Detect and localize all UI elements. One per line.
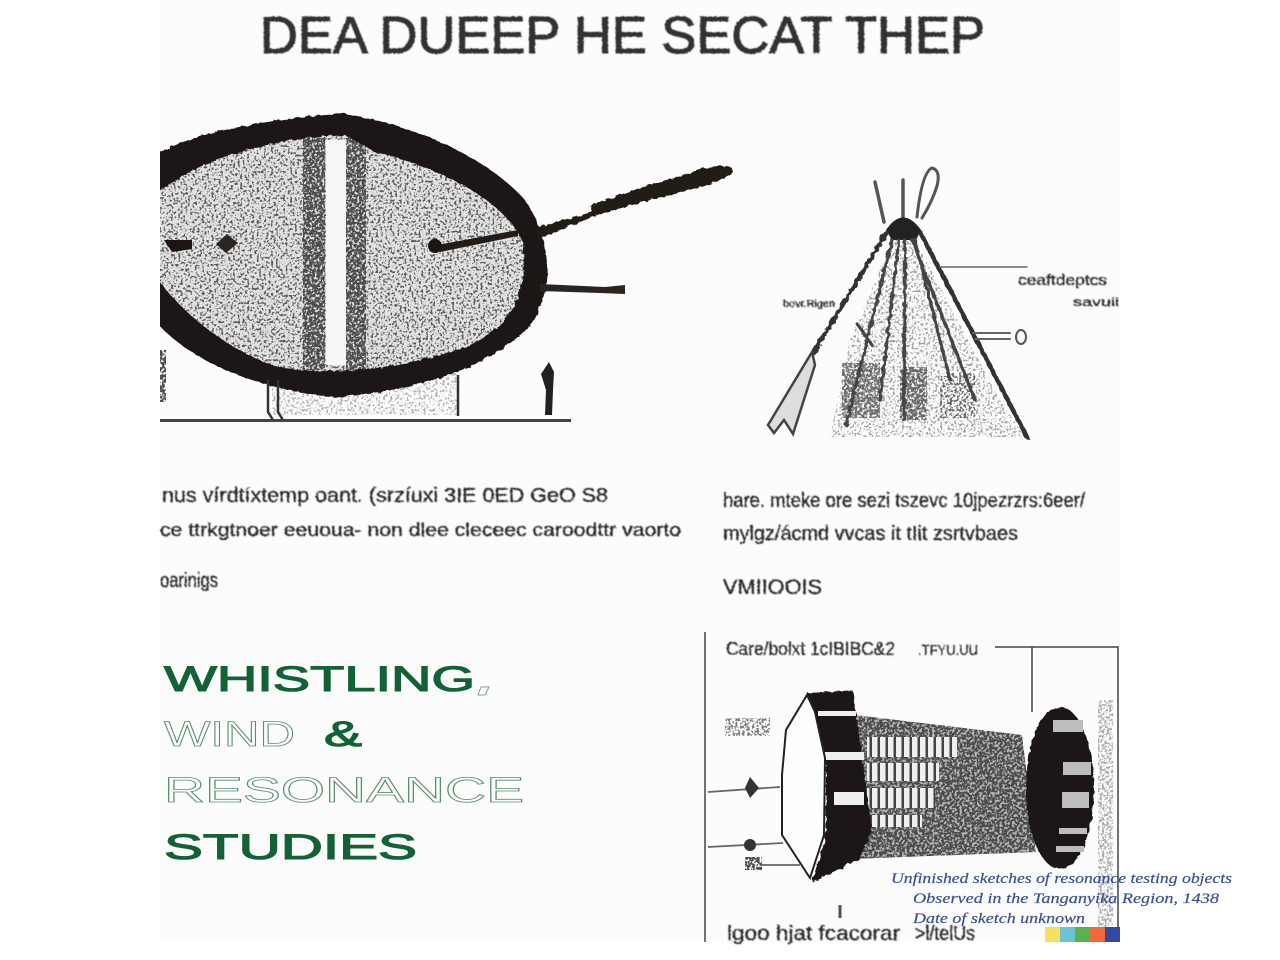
frame lines xyxy=(705,632,1118,942)
ring highlights xyxy=(818,711,864,805)
right wheel xyxy=(1026,707,1094,869)
drawing labels xyxy=(726,639,978,945)
garbled body text: right column: mylgz/ácmd vvcas it tIit zsrtvbaes xyxy=(723,523,1018,545)
drawing labels: .TFYU.UU xyxy=(918,642,978,659)
lighter window rows xyxy=(867,737,957,827)
garbled body text: right column: hare. mteke ore sezi tszevc 10jpezrzrs:6eer/ xyxy=(723,490,1085,512)
caption: Observed in the Tanganyika Region, 1438 xyxy=(913,891,1220,907)
cylinder mottling xyxy=(823,715,1036,860)
dark column right of centre strip xyxy=(346,138,366,370)
heading line: resonance: RESONANCE xyxy=(164,771,524,810)
inner ribs xyxy=(846,240,975,425)
spike feather xyxy=(535,166,733,238)
tipi labels: bovr.Rigen xyxy=(783,299,835,310)
garbled body text: left column: ce ttrkgtnoer eeuoua- non dlee cleceec caroodttr vaorto xyxy=(160,520,681,540)
drawing labels: >l/telUs xyxy=(915,923,975,945)
garbled body text: left column xyxy=(160,485,681,592)
caption: Date of sketch unknown xyxy=(912,911,1085,927)
garbled body text: right column: VMIIOOIS xyxy=(723,576,822,599)
leader diamond xyxy=(745,777,759,798)
white lens xyxy=(782,695,825,878)
top loop xyxy=(917,168,938,218)
drawing labels: lgoo hjat fcacorar xyxy=(727,923,900,945)
main heading xyxy=(164,660,524,867)
dark column left of centre strip xyxy=(303,138,325,370)
sketch: framed cylinder xyxy=(705,632,1118,945)
caption: Unfinished sketches of resonance testing objects xyxy=(891,871,1232,887)
ground line xyxy=(160,419,571,422)
leader ball xyxy=(744,839,756,851)
tipi labels: ceaftdeptcs xyxy=(1018,272,1107,289)
outer poles xyxy=(812,232,1027,437)
cylinder body xyxy=(823,715,1036,860)
tipi body shading xyxy=(830,240,1025,437)
inner spike and dot xyxy=(432,230,518,252)
left diamond xyxy=(216,234,238,253)
side ring xyxy=(1016,330,1026,344)
sketch: conical tipi xyxy=(768,168,1119,437)
side cylinder xyxy=(973,333,1010,339)
tipi labels xyxy=(783,272,1119,310)
white centre strip xyxy=(326,140,346,365)
legs xyxy=(268,375,458,420)
thick oval ring xyxy=(150,113,547,397)
drawing labels: Care/bolxt 1cIBIBC&2 xyxy=(726,639,895,659)
left leader lines xyxy=(708,787,800,865)
stippled base under oval xyxy=(272,372,458,415)
wheel windows xyxy=(1053,720,1091,852)
left marker xyxy=(164,240,192,252)
oval interior fill xyxy=(160,134,524,372)
dark front ring xyxy=(807,691,872,882)
garbled body text: right column xyxy=(723,490,1085,599)
heading line: wind: WIND xyxy=(164,715,295,754)
garbled body text: left column: oarinigs xyxy=(160,570,218,592)
heading line: studies: STUDIES xyxy=(164,828,417,867)
heading line: whistling: WHISTLING xyxy=(164,660,475,699)
right dotted strip xyxy=(1098,700,1113,932)
tipi labels: savuii xyxy=(1073,295,1119,309)
heading ampersand: & xyxy=(324,715,362,754)
colour swatch bar xyxy=(1045,927,1120,942)
garbled body text: left column: nus vírdtíxtemp oant. (srzíuxi 3IE 0ED GeO S8 xyxy=(162,485,608,507)
side handle xyxy=(540,284,625,294)
bottom tick xyxy=(838,905,842,918)
sketch: large oval resonator xyxy=(150,113,733,422)
sketch title: DEA DUEEP HE SECAT THEP xyxy=(260,7,985,65)
scribble marks xyxy=(725,718,770,736)
heading comma xyxy=(478,687,489,695)
left paddle xyxy=(768,352,815,434)
caption xyxy=(891,871,1232,927)
left edge tick xyxy=(160,350,166,402)
oval interior texture xyxy=(160,134,524,372)
sketch paper panel xyxy=(160,0,1120,942)
top sticks xyxy=(875,180,903,222)
apex knot xyxy=(886,218,921,240)
standing figure xyxy=(541,362,554,415)
hatched lower panels xyxy=(842,363,880,418)
leader line xyxy=(940,266,1027,268)
